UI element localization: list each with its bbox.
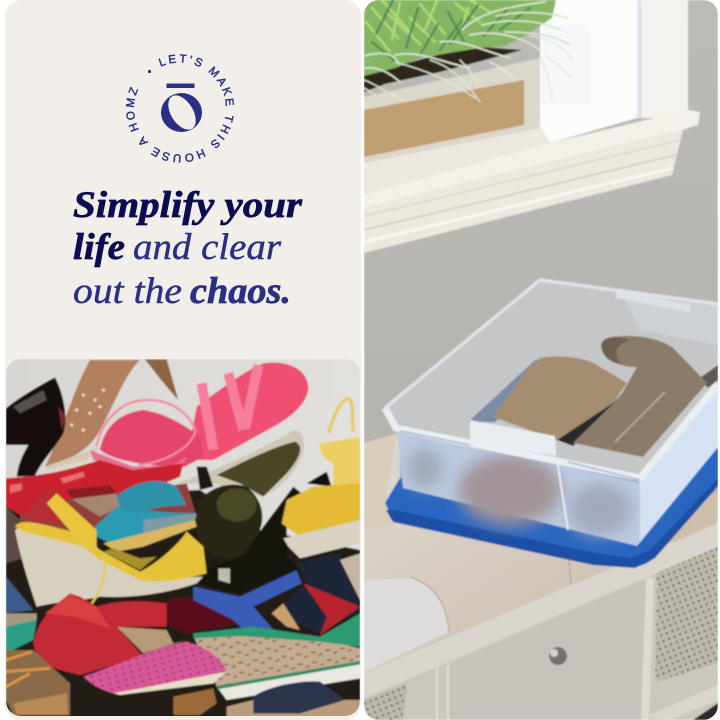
heading line 2 regular: and clear: [133, 227, 282, 268]
maroon loafer: [160, 598, 240, 633]
bench frame: [364, 523, 718, 720]
logo: circular badge: [126, 54, 234, 163]
red bow shoe: [33, 593, 167, 675]
dark round sole: [197, 485, 262, 558]
grass: [364, 0, 572, 102]
box rim: [385, 384, 718, 478]
badge dot: [148, 70, 151, 73]
teal sandal: [95, 507, 197, 545]
clear plastic box: [385, 280, 718, 546]
navy and red shoe right: [284, 553, 360, 634]
tan strappy sandal: [6, 650, 70, 715]
box latch: [470, 420, 556, 456]
right yellow shoe strap: [328, 398, 353, 433]
window sill molding: [364, 110, 700, 253]
black patent shoe: [197, 487, 302, 593]
woven wedge sole: [177, 430, 304, 497]
heel and yellow wedge sandal: [25, 490, 73, 523]
drawer knob: [549, 647, 567, 665]
window frame: [540, 0, 688, 146]
drawer front: [450, 578, 647, 720]
panel: left message card: [5, 0, 361, 720]
heading: [73, 185, 303, 312]
blue lid tray: [385, 445, 718, 568]
photo: pile of shoes: [6, 359, 360, 720]
yellow wrap sandal right: [282, 483, 360, 537]
right translucent side: [640, 388, 718, 542]
blue flower: [117, 481, 187, 513]
planter box: [364, 46, 540, 163]
heading line 2 bold: life: [73, 227, 125, 268]
back latch: [616, 290, 690, 312]
box interior back wall: [385, 280, 718, 478]
photo: storage box on bench: [364, 0, 718, 720]
bench cushion: [364, 433, 718, 673]
red patent flat: [6, 460, 183, 515]
boot shadow through plastic: [458, 454, 562, 526]
teal scrap: [6, 620, 37, 653]
grey-brown boot: [573, 336, 707, 457]
tan pump: [45, 360, 140, 467]
box front face: [397, 388, 718, 546]
heading line 1: Simplify your: [73, 185, 303, 226]
dark fill behind the pile: [6, 490, 360, 720]
badge mark: bar over ring: [161, 84, 202, 134]
pink sandal: [187, 363, 308, 460]
left wicker basket: [364, 683, 407, 720]
badge ring text: LET'S MAKE THIS HOUSE A HOMZ: [126, 54, 234, 163]
tan boot: [493, 356, 627, 440]
cork wedge: [193, 634, 360, 687]
heading line 3 regular: out the: [73, 271, 182, 312]
tan sole and navy shoe: [173, 688, 217, 715]
heading line 3 bold: chaos.: [190, 271, 291, 312]
right wicker basket: [655, 547, 718, 682]
black patent pump: [6, 377, 65, 477]
pink perforated flat: [83, 642, 227, 693]
tan heel under bow shoe: [117, 627, 187, 653]
boot floor strip: [468, 359, 538, 423]
blue suede sandal: [193, 570, 302, 637]
